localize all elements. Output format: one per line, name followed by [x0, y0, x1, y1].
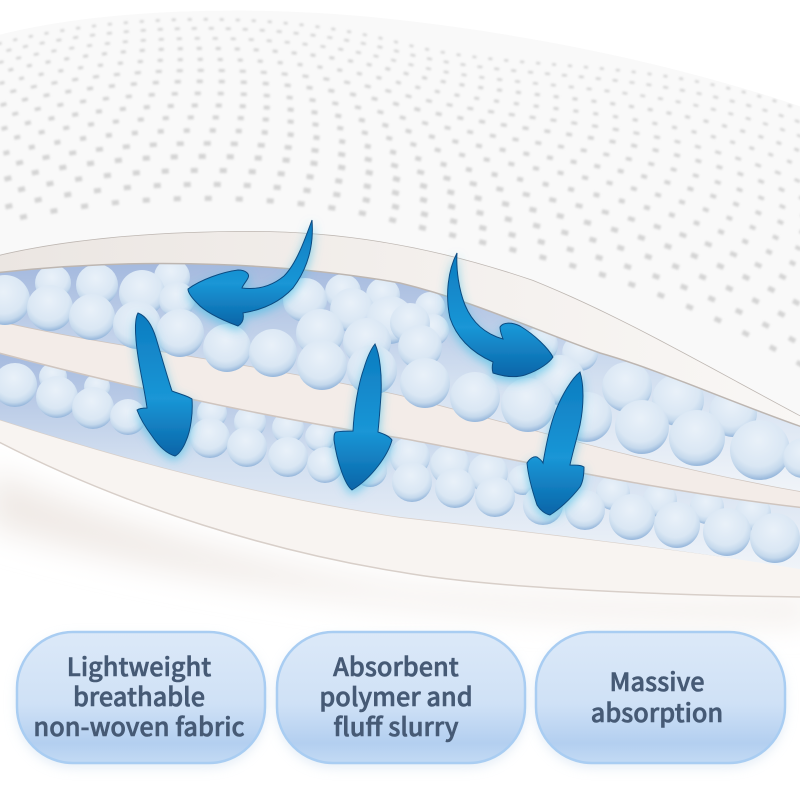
card: polymer slurry: [277, 632, 525, 767]
card text: polymer and: [319, 678, 473, 714]
card text: non-woven fabric: [33, 708, 245, 744]
card text: Absorbent: [333, 648, 459, 684]
card text: [591, 663, 723, 730]
arrow: right pointing down: [527, 372, 584, 515]
card text: [33, 648, 245, 744]
perforated pillow top surface: [0, 11, 800, 418]
lower bead channel: [0, 350, 800, 570]
card text: absorption: [591, 694, 723, 730]
arrow: centre pointing down: [334, 344, 392, 490]
top fabric lip: [0, 231, 800, 428]
arrow: curved, top centre pointing left: [188, 220, 312, 326]
upper bead channel: [0, 259, 800, 492]
arrow: left pointing down: [135, 313, 192, 456]
card text: [319, 648, 473, 744]
middle fabric layer: [0, 320, 800, 508]
card text: Lightweight: [67, 648, 211, 684]
card: lightweight fabric: [17, 632, 265, 767]
arrow: curved, centre-right pointing right: [448, 253, 553, 377]
card text: fluff slurry: [333, 708, 459, 744]
card: massive absorption: [536, 632, 785, 767]
card text: breathable: [73, 678, 205, 714]
bottom fabric layer: [0, 418, 800, 597]
soft shadow under pillow: [0, 470, 800, 620]
card text: Massive: [609, 663, 705, 699]
